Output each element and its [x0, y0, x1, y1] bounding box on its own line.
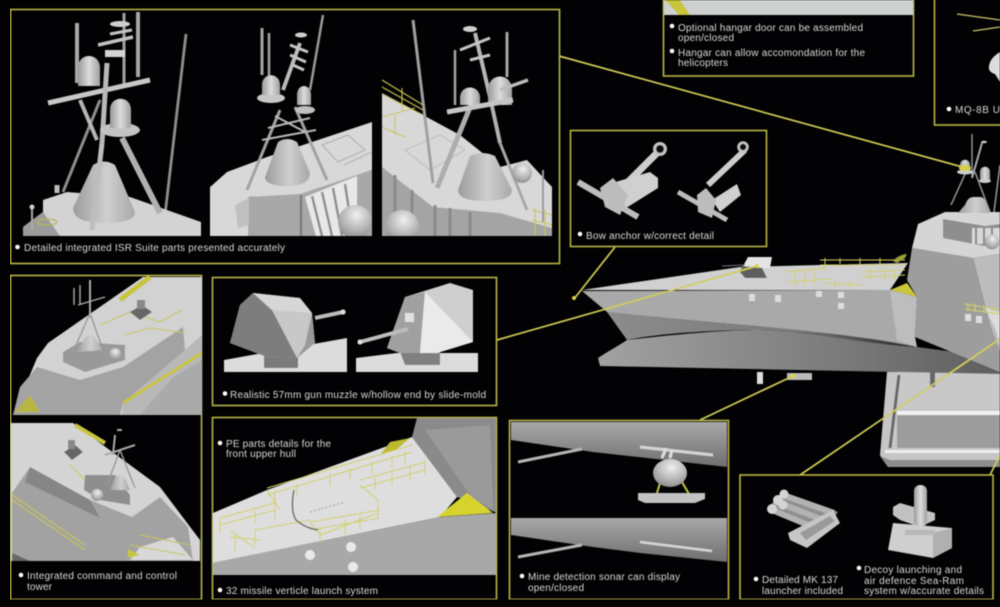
bottom parts: [757, 372, 763, 384]
fore deck: [582, 263, 908, 290]
caption: PE parts: [218, 439, 331, 460]
gun view two: [356, 283, 478, 372]
caption: MK 137: Detailed MK 137: [762, 575, 838, 586]
photo: mast view one: [23, 10, 201, 236]
panel: front upper hull: [212, 418, 497, 600]
photo: sonar deployed: [511, 422, 727, 503]
photo: deck: [213, 418, 497, 575]
hull squares: [749, 291, 844, 309]
panel: ISR suite: [10, 10, 560, 264]
ship model: [582, 134, 1000, 384]
caption: PE parts: PE parts details for the: [226, 439, 331, 450]
leader lines: [497, 56, 1000, 475]
panel: command and control tower: [10, 276, 202, 600]
caption: MK 137: [754, 575, 843, 597]
tower top deck: [912, 212, 1000, 258]
deck rails: [785, 258, 905, 288]
caption: Sea-Ram: Decoy launching and: [864, 565, 962, 576]
panel: launchers: [740, 475, 993, 600]
caption: hangar: Hangar can allow accomondation for the: [678, 48, 865, 59]
caption: Realistic 57mm gun muzzle w/hollow end by slide-mold: [230, 390, 486, 401]
caption: [19, 571, 177, 593]
display stand: [880, 372, 1000, 467]
hull shadow: [607, 312, 917, 347]
panel: hangar door: [664, 0, 914, 76]
panel: 57mm gun: [212, 278, 496, 406]
hull side: [582, 290, 917, 347]
caption: hangar: helicopters: [678, 58, 728, 69]
panel: mine detection sonar: [510, 420, 728, 600]
photo: tower top view: [13, 277, 202, 415]
caption: PE parts: front upper hull: [226, 449, 296, 460]
photo: sonar closed: [511, 518, 727, 562]
tower rail and squares: [965, 303, 1000, 315]
tower wall side: [973, 254, 1000, 353]
photo: mast view three: [382, 20, 552, 244]
photo: tower rear view: [10, 423, 200, 561]
panel: MQ-8B UAV: [934, 0, 1000, 125]
photo: hangar: [664, 0, 913, 15]
caption: Mine detection sonar can display: [528, 572, 680, 583]
caption: MK 137: launcher included: [762, 586, 843, 597]
caption: Sea-Ram: air defence Sea-Ram: [864, 576, 964, 587]
PE rails: [220, 445, 425, 552]
upper block: [943, 219, 1000, 246]
caption: Bow anchor w/correct detail: [586, 231, 714, 242]
caption: hangar: [670, 48, 865, 69]
gun view one: [224, 293, 347, 372]
photo: mast view two: [209, 15, 372, 239]
anchor one: [578, 144, 666, 217]
tower wall front: [907, 248, 1000, 372]
panel: bow anchor: [570, 130, 766, 246]
aft hull block: [890, 290, 917, 347]
caption: missile system: 32 missile verticle launch system: [226, 586, 378, 597]
caption: Sea-Ram: [857, 565, 984, 597]
bow gun: [742, 257, 772, 268]
caption: [520, 572, 680, 594]
caption: tower: [27, 582, 53, 593]
integrated mast: [951, 134, 1000, 213]
caption: Detailed integrated ISR Suite parts presented accurately: [24, 243, 285, 254]
caption: door: open/closed: [678, 33, 734, 44]
lower hull: [598, 330, 1000, 374]
caption: door: Optional hangar door can be assembled: [678, 23, 863, 34]
caption: door: [670, 23, 863, 44]
icon: Sea-Ram: [888, 485, 952, 558]
caption: Sea-Ram: system w/accurate details: [864, 586, 984, 597]
caption: open/closed: [528, 583, 584, 594]
anchor two: [678, 142, 748, 220]
yellow deck triangle: [890, 283, 917, 297]
caption: Integrated command and control: [27, 571, 177, 582]
icon: MK 137 launcher: [767, 490, 840, 548]
